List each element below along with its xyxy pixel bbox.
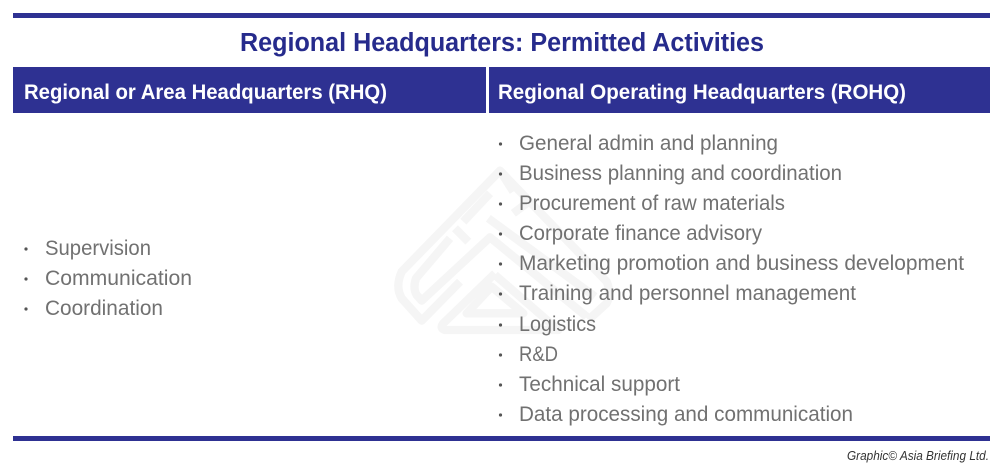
list: ROHQ activities: Training and personnel management bbox=[519, 282, 856, 305]
panel: RHQ header bbox=[13, 67, 486, 113]
list: ROHQ activities: General admin and planning bbox=[519, 132, 778, 155]
watermark logo bbox=[398, 171, 609, 330]
panel: RHQ header: Regional or Area Headquarters (RHQ) bbox=[24, 80, 387, 104]
list: ROHQ activities: R&D bbox=[519, 343, 558, 366]
list: RHQ activities: Communication bbox=[45, 267, 192, 290]
panel: ROHQ header: Regional Operating Headquarters (ROHQ) bbox=[498, 80, 906, 104]
list: ROHQ activities: Corporate finance advisory bbox=[519, 222, 762, 245]
top rule bbox=[13, 13, 990, 18]
list: RHQ activities bbox=[24, 237, 192, 320]
list: ROHQ activities: Business planning and coordination bbox=[519, 162, 842, 185]
panel: ROHQ header bbox=[489, 67, 990, 113]
credit: Graphic© Asia Briefing Ltd. bbox=[847, 448, 989, 463]
list: ROHQ activities: Data processing and communication bbox=[519, 403, 853, 426]
list: ROHQ activities: Procurement of raw materials bbox=[519, 192, 785, 215]
list: RHQ activities: Coordination bbox=[45, 297, 163, 320]
list: ROHQ activities bbox=[499, 132, 964, 426]
list: ROHQ activities: Technical support bbox=[519, 373, 680, 396]
list: ROHQ activities: Marketing promotion and business development bbox=[519, 252, 964, 275]
bottom rule bbox=[13, 436, 990, 441]
list: RHQ activities: Supervision bbox=[45, 237, 151, 260]
title: Regional Headquarters: Permitted Activities bbox=[240, 29, 764, 57]
list: ROHQ activities: Logistics bbox=[519, 313, 596, 336]
